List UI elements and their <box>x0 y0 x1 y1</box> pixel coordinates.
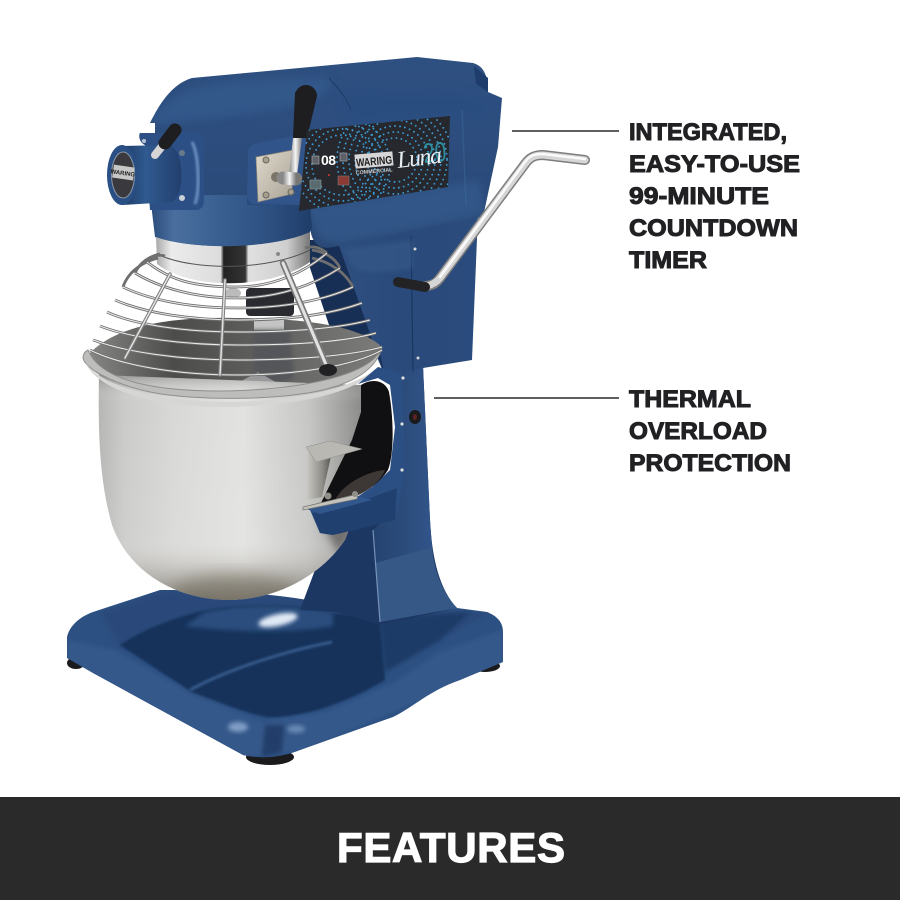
timer control panel <box>299 116 450 211</box>
splash guard wire rings <box>90 247 382 375</box>
splash guard knob <box>319 364 337 376</box>
callout text: timer: EASY-TO-USE <box>629 151 800 178</box>
head neck casting <box>150 195 312 247</box>
icon: rubber feet <box>67 657 500 765</box>
bowl cradle arm <box>304 367 405 535</box>
bowl rim <box>83 347 382 398</box>
bowl interior <box>84 318 382 398</box>
speed lever mount plate <box>247 133 307 205</box>
footer heading: FEATURES <box>337 824 565 871</box>
mixing shaft and hook <box>225 288 294 388</box>
splash guard wire highlights <box>90 253 382 375</box>
callout text: timer: COUNTDOWN <box>629 215 798 242</box>
callout text: thermal: PROTECTION <box>629 450 791 477</box>
callout text: timer <box>629 119 800 274</box>
callout text: thermal <box>629 386 791 477</box>
mixer head <box>148 57 502 248</box>
timer control panel: 20 <box>422 136 447 169</box>
callout: thermal overload <box>434 386 791 477</box>
footer banner <box>0 797 900 900</box>
leader line to timer panel <box>512 130 619 132</box>
callout: countdown timer <box>512 119 800 274</box>
stainless mixing bowl <box>99 375 365 615</box>
callout text: thermal: OVERLOAD <box>629 418 767 445</box>
rear gearbox block <box>310 212 478 376</box>
timer control panel: COMMERCIAL <box>355 167 393 177</box>
callout text: timer: 99-MINUTE <box>629 183 769 210</box>
small locking knob <box>155 130 175 155</box>
bowl lip band <box>85 362 376 407</box>
leader line to thermal switch <box>434 397 619 399</box>
mixer base <box>67 590 503 757</box>
bent crank handle <box>398 154 585 287</box>
timer control panel: 08 <box>321 152 336 168</box>
panel: mixer product illustration <box>67 57 585 765</box>
motor end cylinder with logo: WARING <box>110 169 136 179</box>
speed lever <box>283 85 317 179</box>
splash guard ribs <box>125 263 327 375</box>
callout text: thermal: THERMAL <box>629 386 751 413</box>
bowl support ring <box>156 232 310 283</box>
timer control panel: Luna <box>395 143 443 174</box>
bowl lift bracket <box>303 441 362 510</box>
motor cap flange <box>139 133 204 210</box>
motor end cylinder with logo <box>107 145 182 205</box>
callout text: timer: TIMER <box>629 247 707 274</box>
callout text: timer: INTEGRATED, <box>629 119 787 146</box>
timer control panel: WARING <box>356 154 393 170</box>
mixer column <box>300 366 457 625</box>
